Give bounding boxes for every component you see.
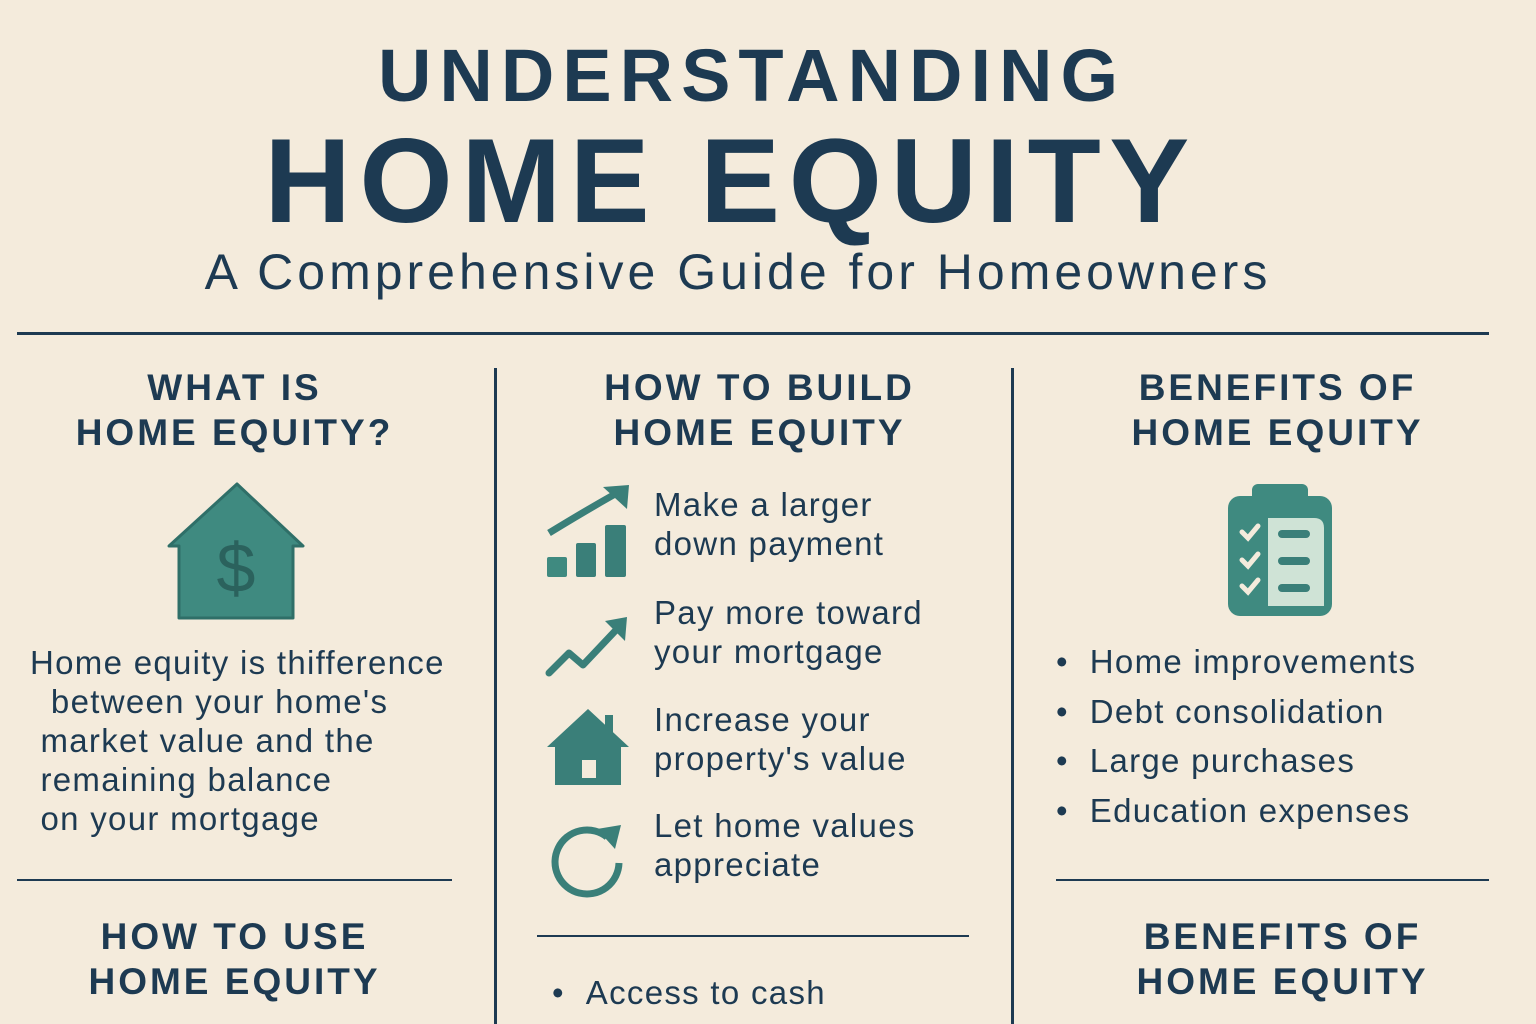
icon: clipboard xyxy=(1228,484,1332,616)
text: appreciate: appreciate xyxy=(654,846,821,883)
text: definition: market value and the xyxy=(40,722,375,759)
heading: what is xyxy=(76,367,393,453)
title: HOME EQUITY xyxy=(264,114,1198,248)
heading: benefits: BENEFITS OF xyxy=(1139,367,1416,408)
text: definition: on your mortgage xyxy=(40,800,320,837)
text: definition xyxy=(30,644,445,837)
heading: how to use: HOW TO USE xyxy=(101,916,368,957)
text: increase value: Increase your xyxy=(654,701,871,738)
text: access to cash: • Access to cash xyxy=(552,974,826,1011)
text: increase value xyxy=(654,701,907,777)
text: definition: remaining balance xyxy=(40,761,332,798)
text: larger down payment: down payment xyxy=(654,525,884,562)
heading: how to use: HOME EQUITY xyxy=(88,961,381,1002)
heading: benefits bottom: HOME EQUITY xyxy=(1136,961,1429,1002)
heading: what is: WHAT IS xyxy=(147,367,322,408)
list: benefits: • Home improvements xyxy=(1056,643,1416,680)
text: pay more: Pay more toward xyxy=(654,594,923,631)
text: larger down payment xyxy=(654,486,884,562)
text: larger down payment: Make a larger xyxy=(654,486,873,523)
heading: how to use xyxy=(88,916,381,1002)
heading: how to build xyxy=(604,367,915,453)
panel: what is home equity xyxy=(30,367,445,837)
title xyxy=(264,34,1198,248)
text: appreciate xyxy=(654,807,916,883)
list: benefits: • Education expenses xyxy=(1056,792,1410,828)
icon: house xyxy=(547,709,629,785)
heading: benefits bottom xyxy=(1136,916,1429,1002)
heading: how to build: HOME EQUITY xyxy=(613,412,906,453)
list: benefits: • Debt consolidation xyxy=(1056,692,1385,730)
icon: house dollar xyxy=(168,482,305,620)
text: pay more xyxy=(654,594,923,670)
text: definition: between your home's xyxy=(51,683,388,720)
heading: benefits: HOME EQUITY xyxy=(1131,412,1424,453)
heading: benefits xyxy=(1131,367,1424,453)
icon: zigzag arrow xyxy=(546,617,627,676)
icon: bars arrow xyxy=(547,485,629,577)
icon: refresh xyxy=(552,825,622,898)
title: UNDERSTANDING xyxy=(378,34,1126,117)
list: benefits: • Large purchases xyxy=(1056,742,1355,779)
subtitle: A Comprehensive Guide for Homeowners xyxy=(205,244,1271,300)
text: appreciate: Let home values xyxy=(654,807,916,844)
text: definition: Home equity is thifference xyxy=(30,644,445,681)
heading: benefits bottom: BENEFITS OF xyxy=(1144,916,1421,957)
panel: benefits xyxy=(1056,367,1424,829)
text: pay more: your mortgage xyxy=(654,633,884,670)
panel: how to build xyxy=(546,367,923,898)
heading: what is: HOME EQUITY? xyxy=(76,412,393,453)
heading: how to build: HOW TO BUILD xyxy=(604,367,915,408)
icon: house dollar: $ xyxy=(217,529,255,607)
text: increase value: property's value xyxy=(654,740,907,777)
list: benefits xyxy=(1056,643,1416,829)
